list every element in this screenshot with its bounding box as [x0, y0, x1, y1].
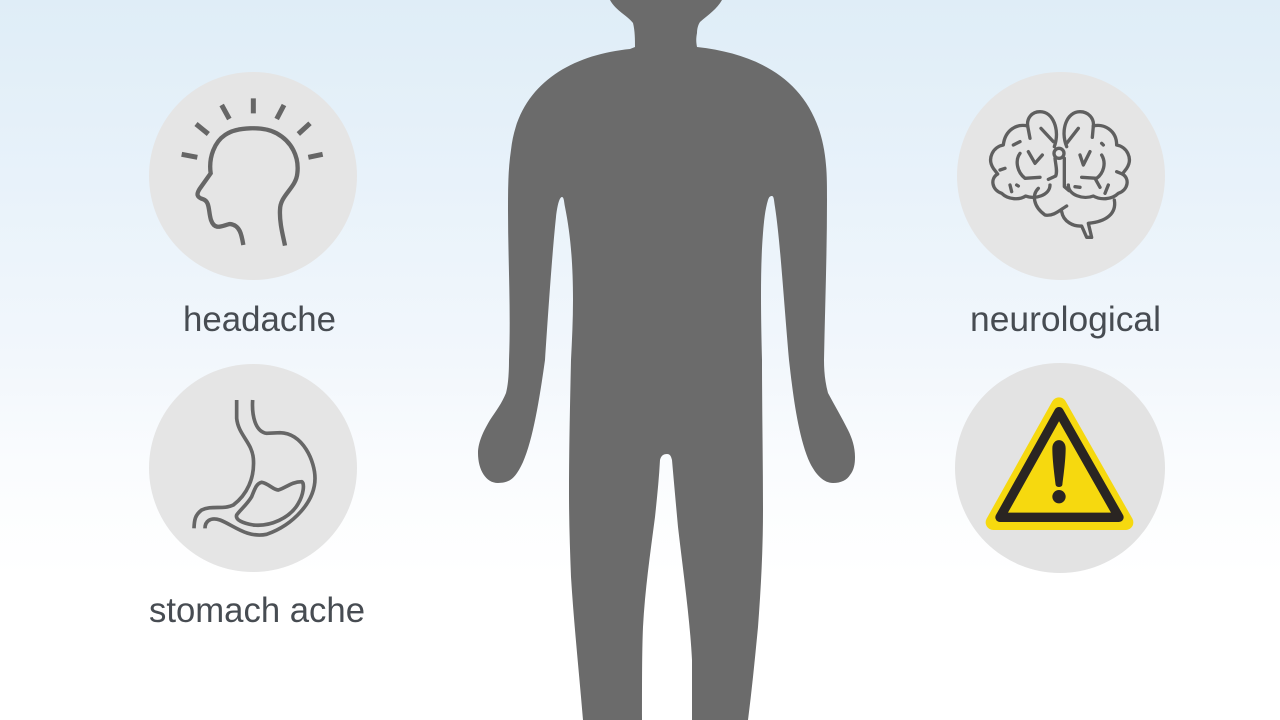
label: stomach ache: stomach ache: [149, 591, 365, 630]
headache circle: [149, 72, 357, 280]
panel: neurological: [957, 72, 1165, 339]
icon: warning triangle: [993, 405, 1126, 522]
panel: warning: [955, 363, 1165, 573]
stomach circle: [149, 364, 357, 572]
icon: stomach: [194, 400, 315, 535]
neurological circle: [957, 72, 1165, 280]
panel: stomach ache: [149, 364, 365, 630]
warning circle: [955, 363, 1165, 573]
panel: headache: [149, 72, 357, 339]
icon: head with radiating pain lines: [182, 98, 323, 246]
icon: brain: [991, 112, 1129, 237]
label: neurological: neurological: [970, 300, 1161, 339]
label: headache: headache: [183, 300, 336, 339]
human body silhouette: [478, 0, 855, 720]
